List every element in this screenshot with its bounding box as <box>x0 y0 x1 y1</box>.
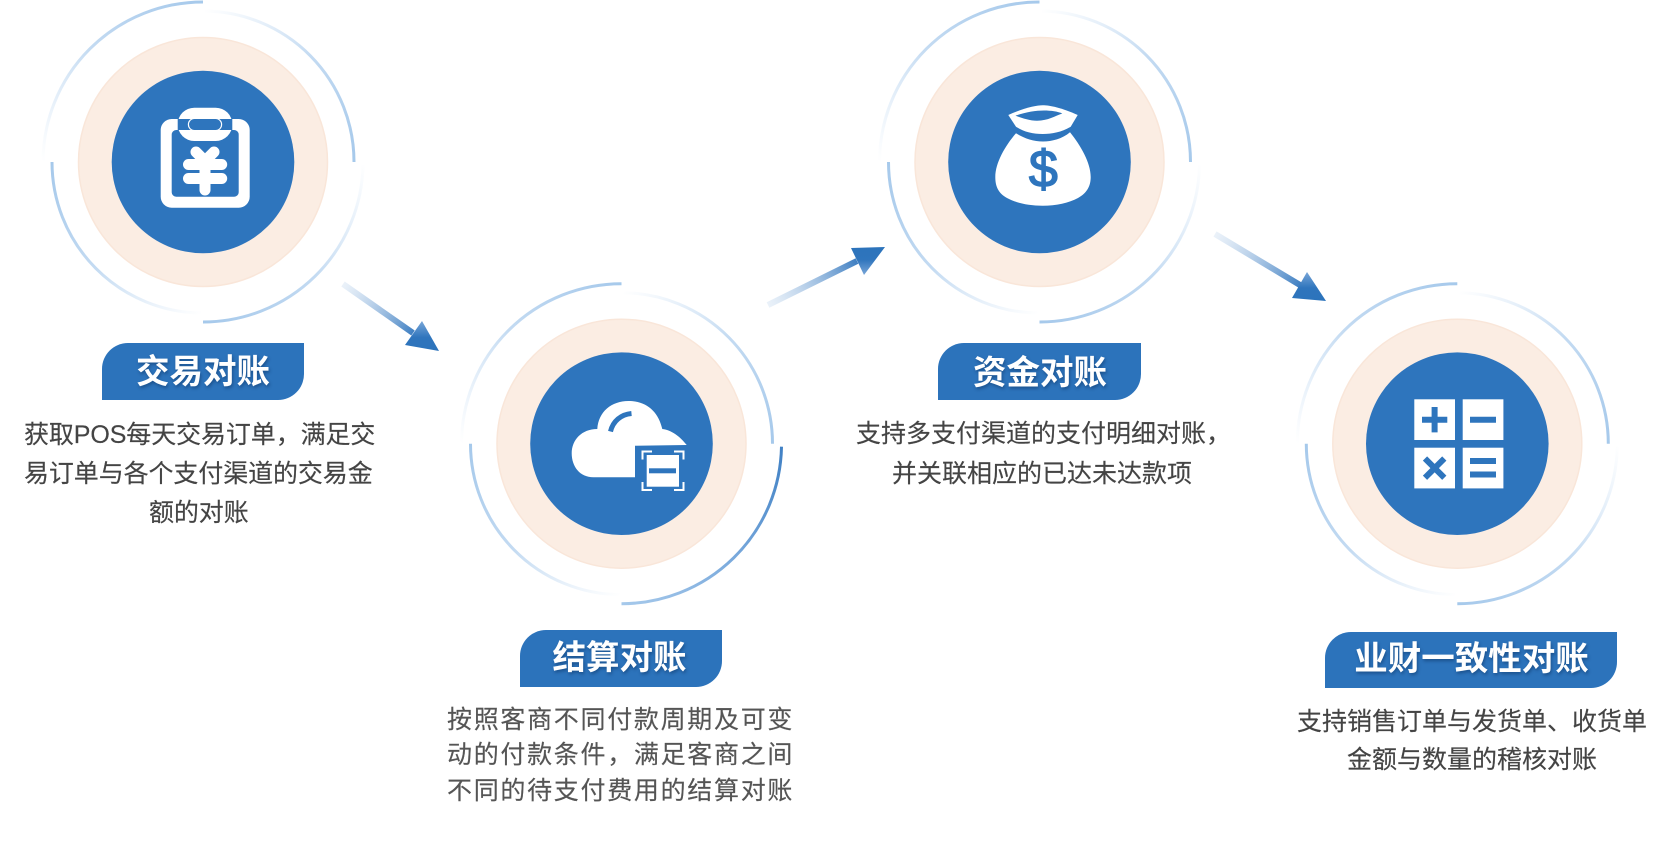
heading: 业财一致性对账: 业财一致性对账 <box>1354 641 1589 678</box>
arrow: step 3 to step 4 <box>1215 234 1326 301</box>
heading: 交易对账 <box>102 343 304 400</box>
heading: 交易对账: 交易对账 <box>136 354 270 391</box>
text block: step 4 description: 金额与数量的稽核对账 <box>1347 746 1597 774</box>
heading: 资金对账: 资金对账 <box>973 355 1107 392</box>
text block: step 1 description <box>24 421 375 527</box>
text block: step 2 description <box>447 706 794 805</box>
arrow: step 1 to step 2 <box>343 284 439 351</box>
text block: step 2 description: 动的付款条件，满足客商之间 <box>447 741 794 769</box>
text block: step 2 description: 不同的待支付费用的结算对账 <box>447 777 794 805</box>
text block: step 3 description: 并关联相应的已达未达款项 <box>892 460 1192 488</box>
text block: step 1 description: 易订单与各个支付渠道的交易金 <box>24 460 373 488</box>
arrow: step 2 to step 3 <box>768 247 885 305</box>
text block: step 3 description <box>856 420 1231 488</box>
text block: step 3 description: 支持多支付渠道的支付明细对账， <box>856 420 1231 448</box>
text block: step 4 description <box>1297 708 1647 774</box>
icon: money bag with dollar sign <box>995 105 1091 206</box>
heading: 业财一致性对账 <box>1325 632 1617 688</box>
text block: step 2 description: 按照客商不同付款周期及可变 <box>447 706 794 734</box>
heading: 结算对账 <box>520 630 722 687</box>
step 2 ring and icon <box>462 284 782 604</box>
text block: step 4 description: 支持销售订单与发货单、收货单 <box>1297 708 1647 736</box>
icon: money bag with dollar sign: $ <box>1029 140 1058 198</box>
icon: clipboard with yen sign <box>161 108 250 208</box>
text block: step 1 description: 额的对账 <box>149 499 249 527</box>
heading: 结算对账: 结算对账 <box>552 640 686 677</box>
heading: 资金对账 <box>938 343 1141 400</box>
icon: cloud with scan frame <box>572 401 687 490</box>
step 3 ring and icon <box>880 2 1200 322</box>
step 4 ring and icon <box>1297 284 1617 604</box>
icon: calculator keys <box>1414 399 1503 488</box>
step 1 ring and icon <box>43 2 363 322</box>
text block: step 1 description: 获取POS每天交易订单，满足交 <box>24 421 375 449</box>
